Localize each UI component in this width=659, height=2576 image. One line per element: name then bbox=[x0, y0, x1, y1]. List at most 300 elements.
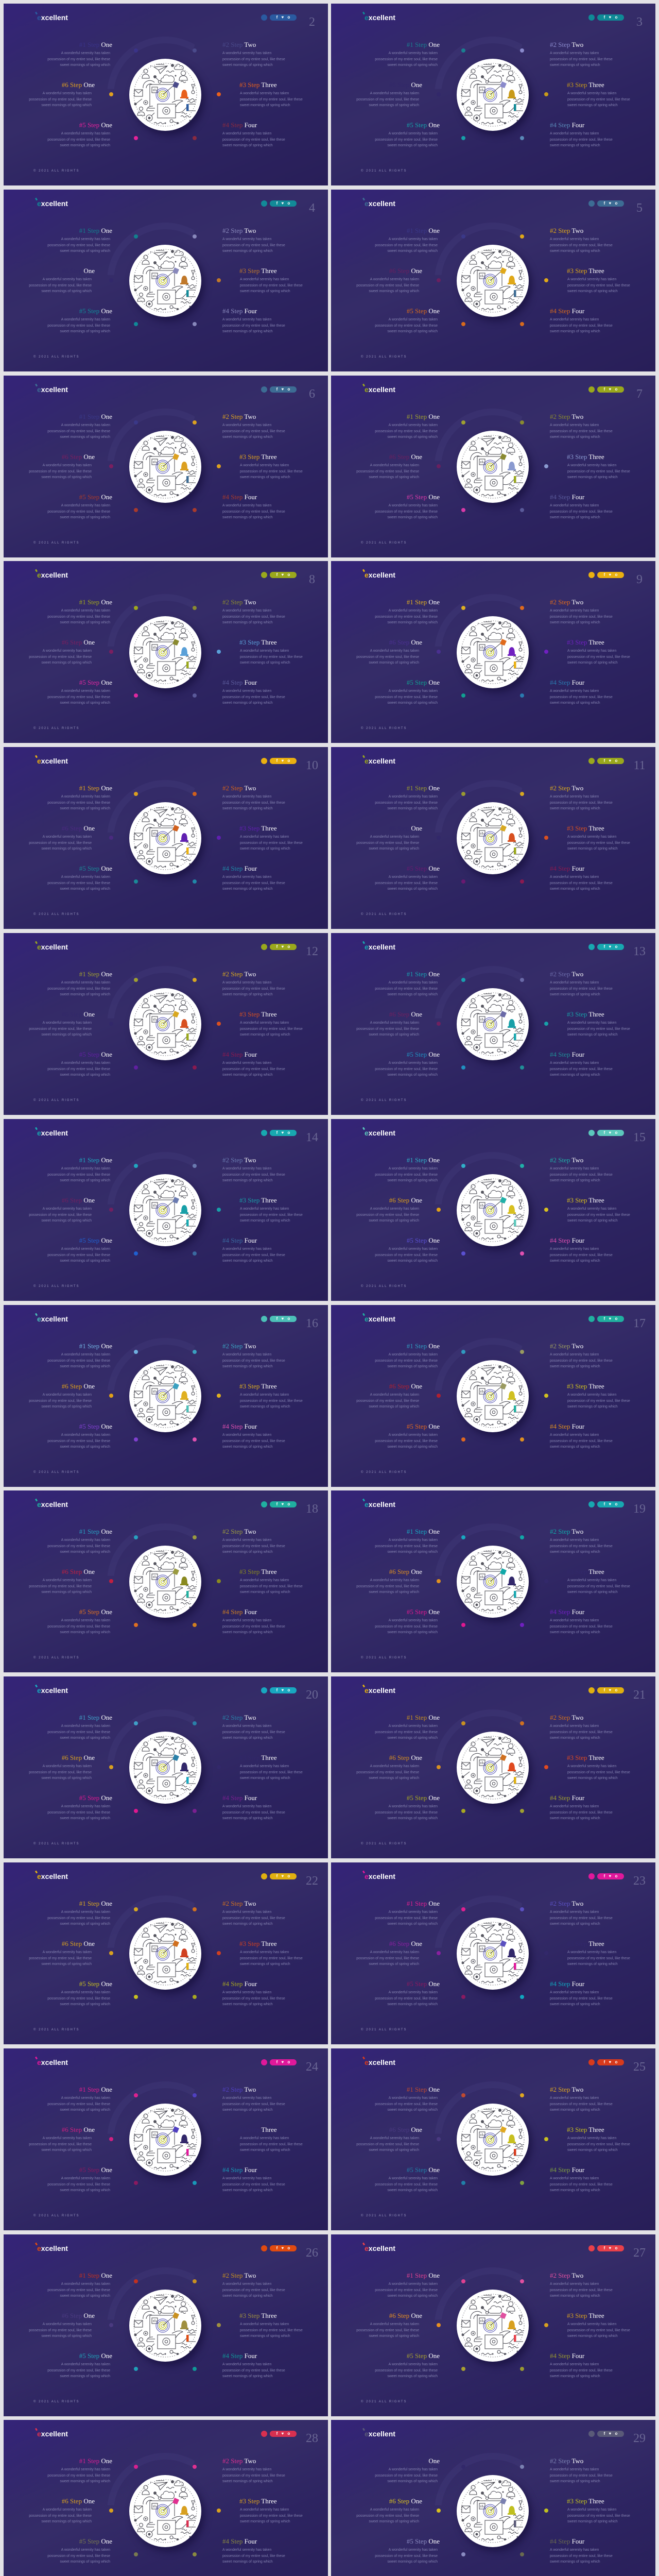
step 1: sweet mornings of spring which bbox=[60, 63, 110, 67]
step 2 bbox=[222, 971, 300, 998]
copyright: © 2021 ALL RIGHTS bbox=[361, 1471, 407, 1474]
social icons: f ♥ o bbox=[604, 201, 617, 206]
step 2: possession of my entire soul, like these bbox=[222, 1173, 285, 1177]
step 1: sweet mornings of spring which bbox=[387, 2294, 438, 2298]
step 4 bbox=[550, 2352, 627, 2380]
logo: excellent bbox=[365, 943, 395, 951]
page number: 19 bbox=[633, 1502, 646, 1516]
step 2: A wonderful serenity has taken bbox=[550, 1538, 599, 1542]
step 4: sweet mornings of spring which bbox=[222, 1259, 273, 1263]
step 6 bbox=[345, 1197, 422, 1224]
dot 6 bbox=[437, 92, 441, 96]
dot 2 bbox=[193, 792, 197, 796]
dot 4 bbox=[193, 1065, 197, 1070]
step 2: sweet mornings of spring which bbox=[550, 807, 600, 810]
step 3: #3 Step Three bbox=[567, 2126, 604, 2133]
step 4: #4 Step Four bbox=[550, 307, 584, 315]
step 3 bbox=[567, 2498, 644, 2525]
logo: excellent bbox=[365, 385, 395, 394]
step 4: #4 Step Four bbox=[222, 1236, 257, 1244]
step 3: possession of my entire soul, like these bbox=[240, 98, 303, 101]
step 2: sweet mornings of spring which bbox=[550, 63, 600, 67]
step 1: sweet mornings of spring which bbox=[60, 621, 110, 624]
page number: 16 bbox=[306, 1317, 318, 1330]
slide 24 bbox=[4, 2048, 328, 2230]
logo: excellent bbox=[37, 13, 68, 22]
step 6: #6 Step One bbox=[62, 1754, 95, 1761]
central illustration bbox=[129, 431, 201, 503]
step 5: possession of my entire soul, like these bbox=[375, 1811, 438, 1815]
dot 3 bbox=[217, 2323, 221, 2327]
step 5: sweet mornings of spring which bbox=[387, 1259, 438, 1263]
step 5: A wonderful serenity has taken bbox=[389, 1991, 438, 1994]
step 6: sweet mornings of spring which bbox=[369, 1033, 419, 1037]
step 4 bbox=[550, 308, 627, 335]
dot 5 bbox=[134, 2552, 138, 2556]
step 3: possession of my entire soul, like these bbox=[240, 1027, 303, 1031]
step 1: sweet mornings of spring which bbox=[60, 249, 110, 253]
step 4: A wonderful serenity has taken bbox=[550, 2548, 599, 2552]
step 2 bbox=[550, 1528, 627, 1555]
step 1: sweet mornings of spring which bbox=[387, 1365, 438, 1368]
central illustration bbox=[457, 988, 529, 1060]
dot 2 bbox=[520, 48, 524, 53]
step 5: possession of my entire soul, like these bbox=[47, 138, 110, 142]
social icons bbox=[261, 758, 297, 764]
step 6: sweet mornings of spring which bbox=[369, 1590, 419, 1594]
step 1 bbox=[35, 1528, 112, 1555]
dot 1 bbox=[134, 2093, 138, 2097]
step 2: possession of my entire soul, like these bbox=[550, 1359, 613, 1363]
step 2: #2 Step Two bbox=[550, 1900, 583, 1907]
step 6: sweet mornings of spring which bbox=[41, 2520, 92, 2523]
step 6: #6 Step One bbox=[389, 2126, 422, 2133]
dot 3 bbox=[544, 2509, 548, 2513]
step 1: #1 Step One bbox=[407, 2272, 440, 2279]
step 3: possession of my entire soul, like these bbox=[567, 1027, 630, 1031]
copyright: © 2021 ALL RIGHTS bbox=[33, 1285, 80, 1288]
step 3: possession of my entire soul, like these bbox=[240, 1771, 303, 1774]
step 5: sweet mornings of spring which bbox=[60, 1073, 110, 1077]
step 2: #2 Step Two bbox=[222, 2086, 256, 2093]
page number: 24 bbox=[306, 2060, 318, 2074]
step 2: sweet mornings of spring which bbox=[222, 1736, 273, 1740]
step 6 bbox=[345, 825, 422, 852]
dot 3 bbox=[217, 836, 221, 840]
step 5: sweet mornings of spring which bbox=[60, 2003, 110, 2006]
step 6: #6 Step One bbox=[389, 638, 422, 646]
social icons: f ♥ o bbox=[276, 1316, 290, 1321]
step 5: A wonderful serenity has taken bbox=[389, 1619, 438, 1622]
slide 13 bbox=[331, 933, 655, 1115]
step 5: A wonderful serenity has taken bbox=[389, 132, 438, 135]
step 3: sweet mornings of spring which bbox=[240, 1219, 290, 1223]
dot 3 bbox=[217, 650, 221, 654]
step 4 bbox=[222, 679, 300, 706]
step 2 bbox=[550, 599, 627, 626]
step 4: sweet mornings of spring which bbox=[222, 1445, 273, 1449]
step 4 bbox=[550, 121, 613, 147]
step 6 bbox=[345, 639, 422, 666]
dot 5 bbox=[134, 2181, 138, 2185]
step 1: #1 Step One bbox=[79, 41, 112, 48]
social icons bbox=[588, 572, 625, 578]
step 1: sweet mornings of spring which bbox=[60, 435, 110, 439]
step 1 bbox=[362, 2458, 440, 2485]
dot 6 bbox=[109, 1022, 113, 1026]
step 3: A wonderful serenity has taken bbox=[240, 2137, 289, 2140]
step 2: possession of my entire soul, like these bbox=[222, 801, 285, 805]
step 1: #1 Step One bbox=[79, 2457, 112, 2465]
dot 2 bbox=[520, 2279, 524, 2283]
step 4: possession of my entire soul, like these bbox=[550, 324, 613, 328]
step 6: A wonderful serenity has taken bbox=[370, 92, 419, 95]
step 1 bbox=[362, 2086, 440, 2113]
step 1: sweet mornings of spring which bbox=[60, 2294, 110, 2298]
step 4: A wonderful serenity has taken bbox=[550, 2177, 599, 2180]
step 4: possession of my entire soul, like these bbox=[222, 696, 285, 699]
central illustration bbox=[129, 988, 201, 1060]
step 4: #4 Step Four bbox=[550, 493, 584, 501]
step 3 bbox=[567, 825, 644, 852]
step 5: possession of my entire soul, like these bbox=[47, 2554, 110, 2558]
step 1: possession of my entire soul, like these bbox=[47, 801, 110, 805]
step 1: #1 Step One bbox=[407, 2086, 440, 2093]
page number: 4 bbox=[309, 201, 315, 215]
step 2: A wonderful serenity has taken bbox=[550, 795, 599, 799]
dot 4 bbox=[193, 1809, 197, 1813]
step 5 bbox=[35, 2352, 112, 2380]
step 5: sweet mornings of spring which bbox=[387, 1817, 438, 1820]
step 2: A wonderful serenity has taken bbox=[550, 1353, 599, 1357]
dot 6 bbox=[437, 1951, 441, 1955]
step 2: A wonderful serenity has taken bbox=[550, 1910, 599, 1914]
step 6: A wonderful serenity has taken bbox=[370, 1579, 419, 1582]
step 5: possession of my entire soul, like these bbox=[47, 510, 110, 514]
dot 4 bbox=[193, 508, 197, 512]
step 5: #5 Step One bbox=[79, 1422, 112, 1430]
copyright: © 2021 ALL RIGHTS bbox=[33, 727, 80, 730]
social icons bbox=[588, 1501, 625, 1507]
step 1: A wonderful serenity has taken bbox=[389, 238, 438, 241]
step 1 bbox=[35, 2458, 112, 2485]
dot 6 bbox=[437, 464, 441, 468]
dot 2 bbox=[193, 234, 197, 239]
step 6 bbox=[18, 1940, 95, 1968]
step 2: sweet mornings of spring which bbox=[550, 2294, 600, 2298]
step 4: #4 Step Four bbox=[222, 307, 257, 315]
step 4: sweet mornings of spring which bbox=[550, 330, 600, 333]
step 4: sweet mornings of spring which bbox=[222, 1817, 273, 1820]
copyright: © 2021 ALL RIGHTS bbox=[361, 541, 407, 545]
step 1: possession of my entire soul, like these bbox=[375, 430, 438, 433]
step 2: possession of my entire soul, like these bbox=[222, 987, 285, 991]
step 6: sweet mornings of spring which bbox=[41, 1405, 92, 1409]
logo: excellent bbox=[37, 1129, 68, 1137]
step 2 bbox=[550, 2272, 627, 2299]
step 2 bbox=[550, 1900, 627, 1927]
step 4: sweet mornings of spring which bbox=[222, 1631, 273, 1634]
step 2: #2 Step Two bbox=[222, 2272, 256, 2279]
dot 4 bbox=[193, 136, 197, 140]
dot 5 bbox=[461, 2181, 465, 2185]
dot 5 bbox=[134, 693, 138, 698]
step 4: A wonderful serenity has taken bbox=[550, 2363, 599, 2366]
step 4: A wonderful serenity has taken bbox=[550, 1805, 599, 1808]
dot 2 bbox=[193, 1535, 197, 1539]
page number: 15 bbox=[633, 1131, 646, 1144]
dot 5 bbox=[461, 2552, 465, 2556]
slide 12 bbox=[4, 933, 328, 1115]
step 5: possession of my entire soul, like these bbox=[47, 2369, 110, 2372]
dot 5 bbox=[461, 1623, 465, 1627]
step 4: sweet mornings of spring which bbox=[550, 701, 600, 705]
step 5: A wonderful serenity has taken bbox=[389, 2548, 438, 2552]
dot 5 bbox=[134, 136, 138, 140]
dot 6 bbox=[109, 1208, 113, 1212]
step 3: sweet mornings of spring which bbox=[567, 1590, 618, 1594]
page number: 9 bbox=[636, 573, 643, 586]
step 3: #3 Step Three bbox=[567, 453, 604, 461]
step 5: #5 Step One bbox=[407, 679, 440, 686]
step 1: #1 Step One bbox=[79, 970, 112, 978]
step 5 bbox=[35, 1608, 112, 1636]
step 4: possession of my entire soul, like these bbox=[550, 1997, 613, 2001]
step 1: #1 Step One bbox=[407, 1528, 440, 1535]
step 5: #5 Step One bbox=[407, 2352, 440, 2360]
step 2: A wonderful serenity has taken bbox=[222, 238, 271, 241]
dot 3 bbox=[544, 650, 548, 654]
step 4 bbox=[550, 1423, 627, 1450]
step 4: #4 Step Four bbox=[222, 1980, 257, 1988]
step 2: possession of my entire soul, like these bbox=[550, 2289, 613, 2292]
dot 3 bbox=[217, 464, 221, 468]
step 2: #2 Step Two bbox=[222, 1528, 256, 1535]
step 1: possession of my entire soul, like these bbox=[47, 2474, 110, 2478]
step 3: A wonderful serenity has taken bbox=[240, 1393, 289, 1397]
step 2: A wonderful serenity has taken bbox=[550, 981, 599, 985]
step 3: #3 Step Three bbox=[239, 1754, 277, 1761]
step 4: sweet mornings of spring which bbox=[222, 2560, 273, 2564]
step 5 bbox=[362, 1051, 440, 1078]
dot 1 bbox=[134, 234, 138, 239]
step 5: sweet mornings of spring which bbox=[387, 330, 438, 333]
central illustration bbox=[457, 59, 529, 131]
central illustration bbox=[129, 245, 201, 317]
step 6 bbox=[345, 2312, 422, 2340]
central illustration bbox=[457, 2290, 529, 2362]
step 4: sweet mornings of spring which bbox=[222, 144, 273, 147]
step 5 bbox=[362, 1423, 440, 1450]
social icons: f ♥ o bbox=[276, 572, 290, 577]
central illustration bbox=[457, 802, 529, 874]
step 6: A wonderful serenity has taken bbox=[370, 1021, 419, 1025]
step 3: possession of my entire soul, like these bbox=[567, 1213, 630, 1217]
step 2: #2 Step Two bbox=[550, 227, 583, 234]
step 4: possession of my entire soul, like these bbox=[222, 1997, 285, 2001]
dot 3 bbox=[217, 1951, 221, 1955]
step 1: #1 Step One bbox=[407, 2457, 440, 2465]
slide 4 bbox=[4, 190, 328, 371]
step 4 bbox=[550, 679, 627, 706]
dot 2 bbox=[520, 1164, 524, 1168]
slide 26 bbox=[4, 2234, 328, 2416]
step 2 bbox=[222, 1528, 300, 1555]
step 6: sweet mornings of spring which bbox=[369, 1776, 419, 1780]
step 4: possession of my entire soul, like these bbox=[222, 882, 285, 885]
step 6: A wonderful serenity has taken bbox=[43, 2137, 92, 2140]
step 3: #3 Step Three bbox=[239, 1568, 277, 1575]
step 6: possession of my entire soul, like these bbox=[356, 2514, 419, 2518]
step 5: sweet mornings of spring which bbox=[387, 2189, 438, 2192]
logo: excellent bbox=[365, 199, 395, 208]
social icons bbox=[588, 758, 625, 764]
step 3: possession of my entire soul, like these bbox=[567, 1585, 630, 1588]
step 4 bbox=[222, 865, 300, 892]
step 5: A wonderful serenity has taken bbox=[61, 689, 110, 693]
logo: excellent bbox=[365, 1129, 395, 1137]
step 2: possession of my entire soul, like these bbox=[222, 1545, 285, 1548]
dot 3 bbox=[217, 2137, 221, 2141]
dot 2 bbox=[520, 2465, 524, 2469]
dot 6 bbox=[437, 278, 441, 282]
step 4 bbox=[550, 494, 627, 521]
step 6: sweet mornings of spring which bbox=[369, 104, 419, 107]
step 3: #3 Step Three bbox=[239, 1196, 277, 1204]
step 2: possession of my entire soul, like these bbox=[550, 615, 613, 619]
step 1: possession of my entire soul, like these bbox=[47, 1917, 110, 1920]
step 5: #5 Step One bbox=[407, 2166, 440, 2174]
step 5: #5 Step One bbox=[407, 865, 440, 872]
step 4: A wonderful serenity has taken bbox=[222, 1991, 271, 1994]
step 4: possession of my entire soul, like these bbox=[222, 1067, 285, 1071]
step 4: possession of my entire soul, like these bbox=[222, 1811, 285, 1815]
step 2: possession of my entire soul, like these bbox=[550, 801, 613, 805]
step 1: possession of my entire soul, like these bbox=[47, 1545, 110, 1548]
social icons bbox=[261, 386, 297, 393]
step 4: possession of my entire soul, like these bbox=[550, 1067, 613, 1071]
step 6: sweet mornings of spring which bbox=[41, 290, 92, 293]
step 1 bbox=[362, 785, 440, 812]
dot 5 bbox=[461, 1437, 465, 1442]
step 3: sweet mornings of spring which bbox=[567, 1776, 618, 1780]
step 1 bbox=[362, 1157, 440, 1184]
step 4 bbox=[222, 2166, 300, 2194]
step 4: A wonderful serenity has taken bbox=[222, 318, 271, 321]
dot 4 bbox=[193, 2552, 197, 2556]
step 2 bbox=[222, 413, 300, 440]
step 2: A wonderful serenity has taken bbox=[222, 2096, 271, 2100]
dot 1 bbox=[461, 234, 465, 239]
logo: excellent bbox=[37, 1315, 68, 1323]
social icons bbox=[261, 1873, 297, 1879]
step 3: sweet mornings of spring which bbox=[567, 290, 618, 293]
step 2: possession of my entire soul, like these bbox=[550, 1173, 613, 1177]
dot 2 bbox=[520, 420, 524, 425]
step 3: #3 Step Three bbox=[567, 1196, 604, 1204]
step 5 bbox=[35, 1237, 112, 1264]
dot 2 bbox=[193, 2279, 197, 2283]
step 6: possession of my entire soul, like these bbox=[29, 1027, 92, 1031]
copyright: © 2021 ALL RIGHTS bbox=[33, 1471, 80, 1474]
dot 5 bbox=[461, 1251, 465, 1256]
step 6: sweet mornings of spring which bbox=[369, 2520, 419, 2523]
central illustration bbox=[129, 1360, 201, 1432]
step 1: A wonderful serenity has taken bbox=[389, 2468, 438, 2471]
step 4: A wonderful serenity has taken bbox=[550, 504, 599, 507]
social icons bbox=[261, 944, 297, 950]
step 6: possession of my entire soul, like these bbox=[356, 1027, 419, 1031]
step 5: sweet mornings of spring which bbox=[60, 1259, 110, 1263]
social icons bbox=[588, 1873, 625, 1879]
step 1 bbox=[362, 413, 440, 440]
step 3: #3 Step Three bbox=[239, 824, 277, 832]
copyright: © 2021 ALL RIGHTS bbox=[361, 2028, 407, 2031]
dot 2 bbox=[193, 2465, 197, 2469]
step 4: possession of my entire soul, like these bbox=[550, 1625, 613, 1629]
step 6: A wonderful serenity has taken bbox=[370, 1207, 419, 1211]
step 2 bbox=[222, 2458, 300, 2485]
step 1: A wonderful serenity has taken bbox=[61, 2468, 110, 2471]
step 6: sweet mornings of spring which bbox=[41, 847, 92, 851]
step 6 bbox=[18, 639, 95, 666]
step 6: sweet mornings of spring which bbox=[41, 476, 92, 479]
step 6 bbox=[345, 1754, 422, 1782]
step 2: #2 Step Two bbox=[550, 784, 583, 792]
step 4: A wonderful serenity has taken bbox=[222, 1805, 271, 1808]
step 6 bbox=[345, 2498, 422, 2525]
dot 5 bbox=[134, 322, 138, 326]
dot 1 bbox=[461, 420, 465, 425]
step 2: A wonderful serenity has taken bbox=[222, 1538, 271, 1542]
dot 3 bbox=[544, 836, 548, 840]
step 3: #3 Step Three bbox=[567, 1568, 604, 1575]
dot 5 bbox=[134, 1065, 138, 1070]
step 1: A wonderful serenity has taken bbox=[61, 2282, 110, 2286]
central illustration bbox=[129, 59, 201, 131]
step 4: sweet mornings of spring which bbox=[222, 2003, 273, 2006]
central illustration bbox=[129, 1918, 201, 1990]
step 6: #6 Step One bbox=[62, 81, 95, 89]
step 4: sweet mornings of spring which bbox=[550, 1631, 600, 1634]
step 5: possession of my entire soul, like these bbox=[47, 1625, 110, 1629]
logo: excellent bbox=[365, 2430, 395, 2438]
step 4 bbox=[222, 307, 285, 333]
dot 4 bbox=[520, 1065, 524, 1070]
step 1: #1 Step One bbox=[79, 413, 112, 420]
central illustration bbox=[457, 1546, 529, 1618]
dot 1 bbox=[134, 1907, 138, 1911]
step 4: #4 Step Four bbox=[222, 865, 257, 872]
step 3: A wonderful serenity has taken bbox=[240, 1021, 289, 1025]
dot 3 bbox=[217, 1765, 221, 1769]
social icons: f ♥ o bbox=[604, 1316, 617, 1321]
step 5: A wonderful serenity has taken bbox=[61, 1805, 110, 1808]
step 2 bbox=[550, 785, 627, 812]
step 4: A wonderful serenity has taken bbox=[550, 875, 599, 879]
step 1: sweet mornings of spring which bbox=[387, 1179, 438, 1182]
step 2: A wonderful serenity has taken bbox=[550, 2282, 599, 2286]
copyright: © 2021 ALL RIGHTS bbox=[33, 913, 80, 916]
step 6: #6 Step One bbox=[62, 2497, 95, 2505]
step 5: sweet mornings of spring which bbox=[387, 144, 438, 147]
dot 4 bbox=[193, 879, 197, 884]
dot 2 bbox=[193, 1350, 197, 1354]
step 5: A wonderful serenity has taken bbox=[389, 1805, 438, 1808]
step 3: sweet mornings of spring which bbox=[567, 104, 618, 107]
dot 2 bbox=[193, 1721, 197, 1725]
step 2 bbox=[222, 227, 285, 253]
